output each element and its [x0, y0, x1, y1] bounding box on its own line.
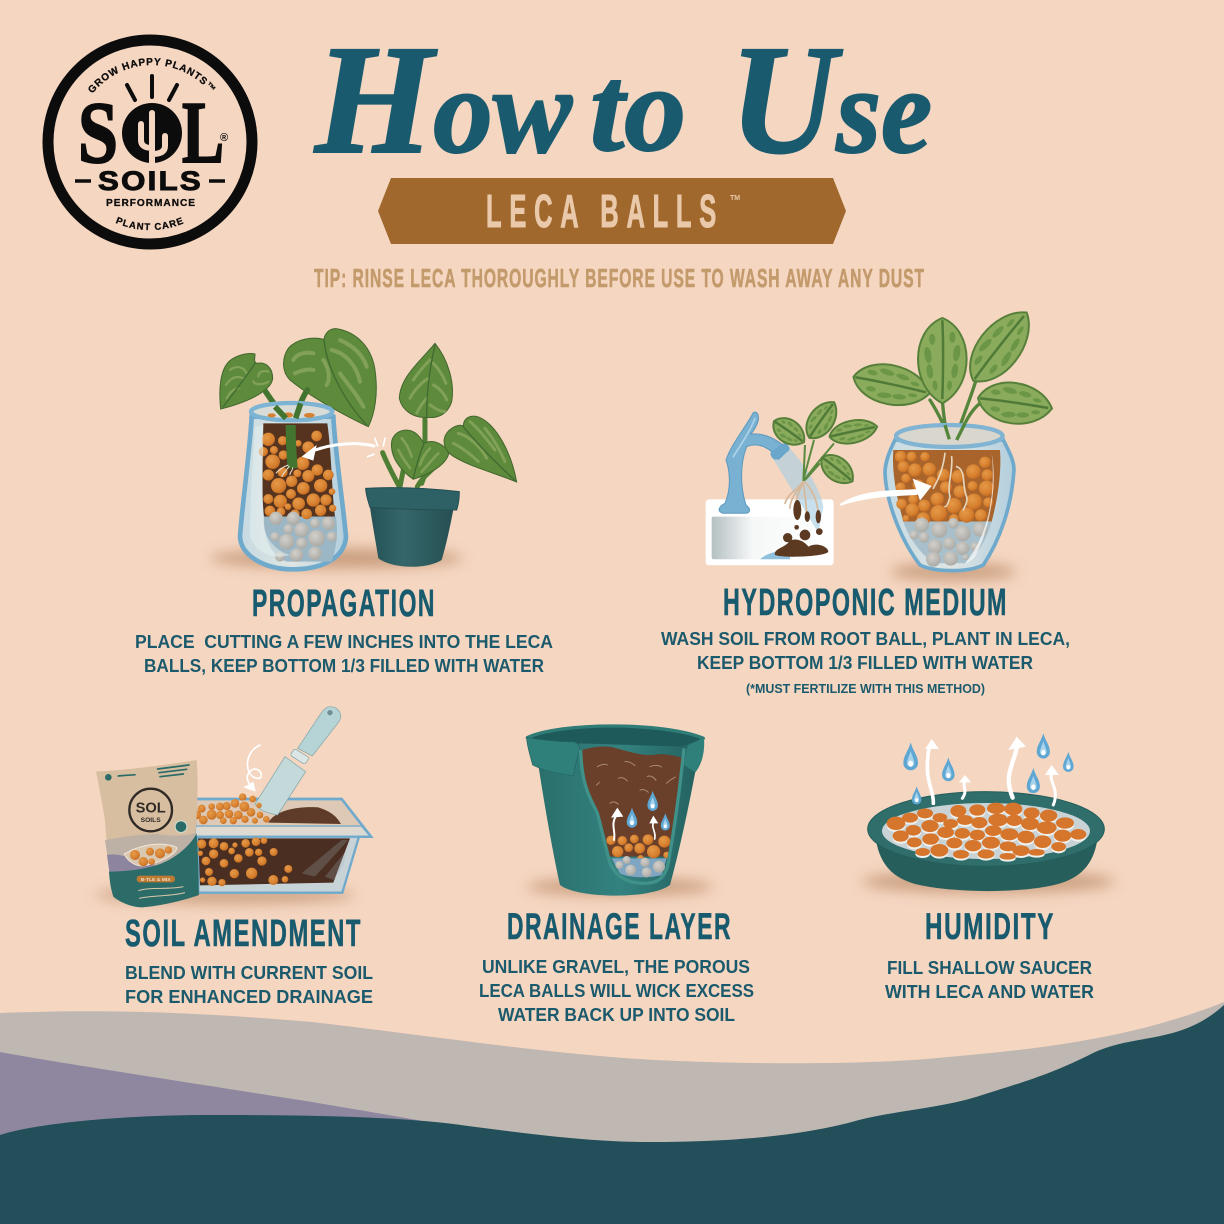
logo sun circle with cactus: [122, 103, 182, 163]
ground shadow: [527, 877, 713, 896]
pot back interior: [527, 726, 703, 757]
faucet: [719, 412, 791, 513]
illustration: cutaway pot: [527, 726, 713, 896]
bag window with leca: [124, 844, 177, 866]
leca balls wet: [909, 518, 987, 567]
cutting stem: [291, 425, 293, 468]
heading: propagation: PROPAGATION: [252, 583, 436, 625]
bottom waves: [0, 1002, 1224, 1224]
water stream: [772, 447, 823, 533]
heading: drainage layer: DRAINAGE LAYER: [507, 906, 732, 947]
description: humidity: WITH LECA AND WATER: [885, 982, 1094, 1002]
title: How: [313, 13, 573, 186]
soil bag: [96, 760, 199, 907]
leca layer: [606, 834, 670, 862]
logo letter S: S: [78, 85, 118, 182]
cut sparkle: [368, 438, 385, 457]
leca mixed in soil: [197, 837, 292, 886]
illustration: bag, tray and trowel: [95, 707, 371, 907]
panel: propagation: [135, 329, 553, 676]
small plant stems: [803, 440, 834, 482]
rising arrows: [925, 737, 1059, 805]
logo word SOILS: SOILS: [98, 166, 203, 196]
roots in leca: [933, 453, 967, 510]
vase rim: [251, 403, 332, 420]
logo rays: [127, 76, 177, 100]
swirl arrow: [243, 745, 261, 792]
pot body: [538, 738, 703, 896]
top leaf: [399, 343, 452, 418]
logo letter L: L: [182, 85, 224, 182]
bag logo: [129, 789, 172, 831]
heading: soil amendment: SOIL AMENDMENT: [125, 913, 362, 955]
saucer rim: [868, 792, 1104, 866]
leca balls wet: [269, 512, 337, 562]
new roots: [276, 465, 293, 477]
washed roots: [785, 482, 818, 517]
heading: hydroponic medium: HYDROPONIC MEDIUM: [723, 582, 1008, 624]
pot rim right: [684, 738, 704, 772]
description: propagation: [135, 632, 553, 676]
right leaf: [444, 416, 517, 482]
water layer with wet balls: [612, 856, 667, 877]
registered mark: ®: [220, 132, 228, 144]
panel: hydroponic medium: [661, 300, 1070, 696]
description: propagation: PLACE CUTTING A FEW INCHES INTO THE LECA: [135, 632, 553, 652]
vase rim: [896, 425, 1003, 447]
arrow to vase: [302, 444, 374, 461]
potted plant stems: [383, 410, 435, 487]
bag label: B-TLE & MIX: [141, 877, 171, 883]
description: soil amendment: [125, 963, 373, 1007]
tray rear rim and body: [195, 799, 371, 893]
description: drainage layer: [479, 957, 754, 1025]
bag label: [137, 876, 175, 883]
wicking arrows: [611, 808, 658, 840]
banner: Leca Balls: TM: [730, 195, 740, 202]
title: to: [590, 42, 686, 177]
illustration: saucer with leca and water: [862, 733, 1115, 894]
logo: Sol Soils badge: [42, 34, 258, 250]
description: hydroponic medium: KEEP BOTTOM 1/3 FILLED WITH WATER: [697, 653, 1033, 673]
leca pile: [192, 793, 270, 824]
description: drainage layer: WATER BACK UP INTO SOIL: [498, 1005, 735, 1025]
leaf stems large: [930, 378, 980, 440]
panel: humidity: [862, 733, 1115, 1002]
right big leaf: [284, 329, 376, 427]
footnote: (*MUST FERTILIZE WITH THIS METHOD): [746, 682, 985, 696]
panel: soil amendment: [95, 707, 373, 1007]
leca balls orange: [259, 431, 336, 519]
rim balls: [268, 412, 315, 418]
left leaf: [220, 354, 273, 409]
description: drainage layer: UNLIKE GRAVEL, THE POROUS: [482, 957, 750, 977]
description: humidity: [885, 958, 1094, 1002]
glass vase: [240, 403, 346, 569]
tray front rim: [195, 826, 371, 837]
illustration: washing roots at sink and planting in leca vase: [706, 300, 1055, 581]
description: soil amendment: FOR ENHANCED DRAINAGE: [125, 987, 373, 1007]
logo PERFORMANCE: PERFORMANCE: [106, 197, 196, 209]
description: soil amendment: BLEND WITH CURRENT SOIL: [125, 963, 373, 983]
description: propagation: BALLS, KEEP BOTTOM 1/3 FILLED WITH WATER: [144, 656, 544, 676]
glass highlight: [250, 425, 290, 557]
leca balls orange: [895, 451, 994, 526]
water drops: [903, 733, 1074, 804]
stems in rim: [275, 403, 301, 418]
description: hydroponic medium: [661, 629, 1070, 696]
lower left leaf: [391, 430, 449, 479]
panel: drainage layer: [479, 726, 754, 1025]
title: [313, 13, 932, 186]
soil falling: [775, 500, 828, 557]
leaf stems: [266, 390, 307, 418]
description: hydroponic medium: WASH SOIL FROM ROOT BALL, PLANT IN LECA,: [661, 629, 1070, 649]
ground shadow: [890, 562, 1017, 581]
glass vase: [885, 425, 1014, 571]
pot cut edge: [581, 748, 684, 883]
small plant leaves: [767, 395, 879, 490]
green pot: [366, 488, 459, 567]
soil specks: [597, 762, 675, 804]
heading: humidity: HUMIDITY: [925, 906, 1055, 947]
leca pads: [887, 803, 1086, 859]
ground shadow: [95, 886, 355, 904]
illustration: cutting in glass vase and potted plant: [210, 329, 517, 569]
logo tagline: GROW HAPPY PLANTS™: [88, 58, 216, 92]
large leaves: [849, 300, 1055, 429]
bag small marks: [158, 765, 189, 777]
saucer inner: [882, 803, 1090, 859]
trowel: [255, 707, 341, 815]
description: drainage layer: LECA BALLS WILL WICK EXCESS: [479, 981, 754, 1001]
ground shadow: [210, 548, 463, 568]
ground shadow: [862, 870, 1115, 894]
saucer base: [876, 840, 1097, 891]
soil section: [582, 747, 683, 857]
arrow to vase: [840, 479, 932, 505]
water drops: [627, 791, 670, 830]
bag logo: SOL: [136, 801, 166, 817]
sink: [706, 499, 834, 565]
stems through rim: [945, 423, 965, 440]
title: Use: [730, 13, 932, 186]
bag logo: SOILS: [141, 817, 161, 824]
pot rim left: [527, 738, 580, 776]
glass highlight: [965, 453, 994, 563]
description: humidity: FILL SHALLOW SAUCER: [887, 958, 1092, 978]
banner: Leca Balls: LECA BALLS: [486, 185, 724, 237]
banner: Leca Balls: [378, 178, 846, 244]
logo dashes: [75, 179, 225, 183]
logo PLANT CARE: PLANT CARE: [116, 216, 184, 230]
